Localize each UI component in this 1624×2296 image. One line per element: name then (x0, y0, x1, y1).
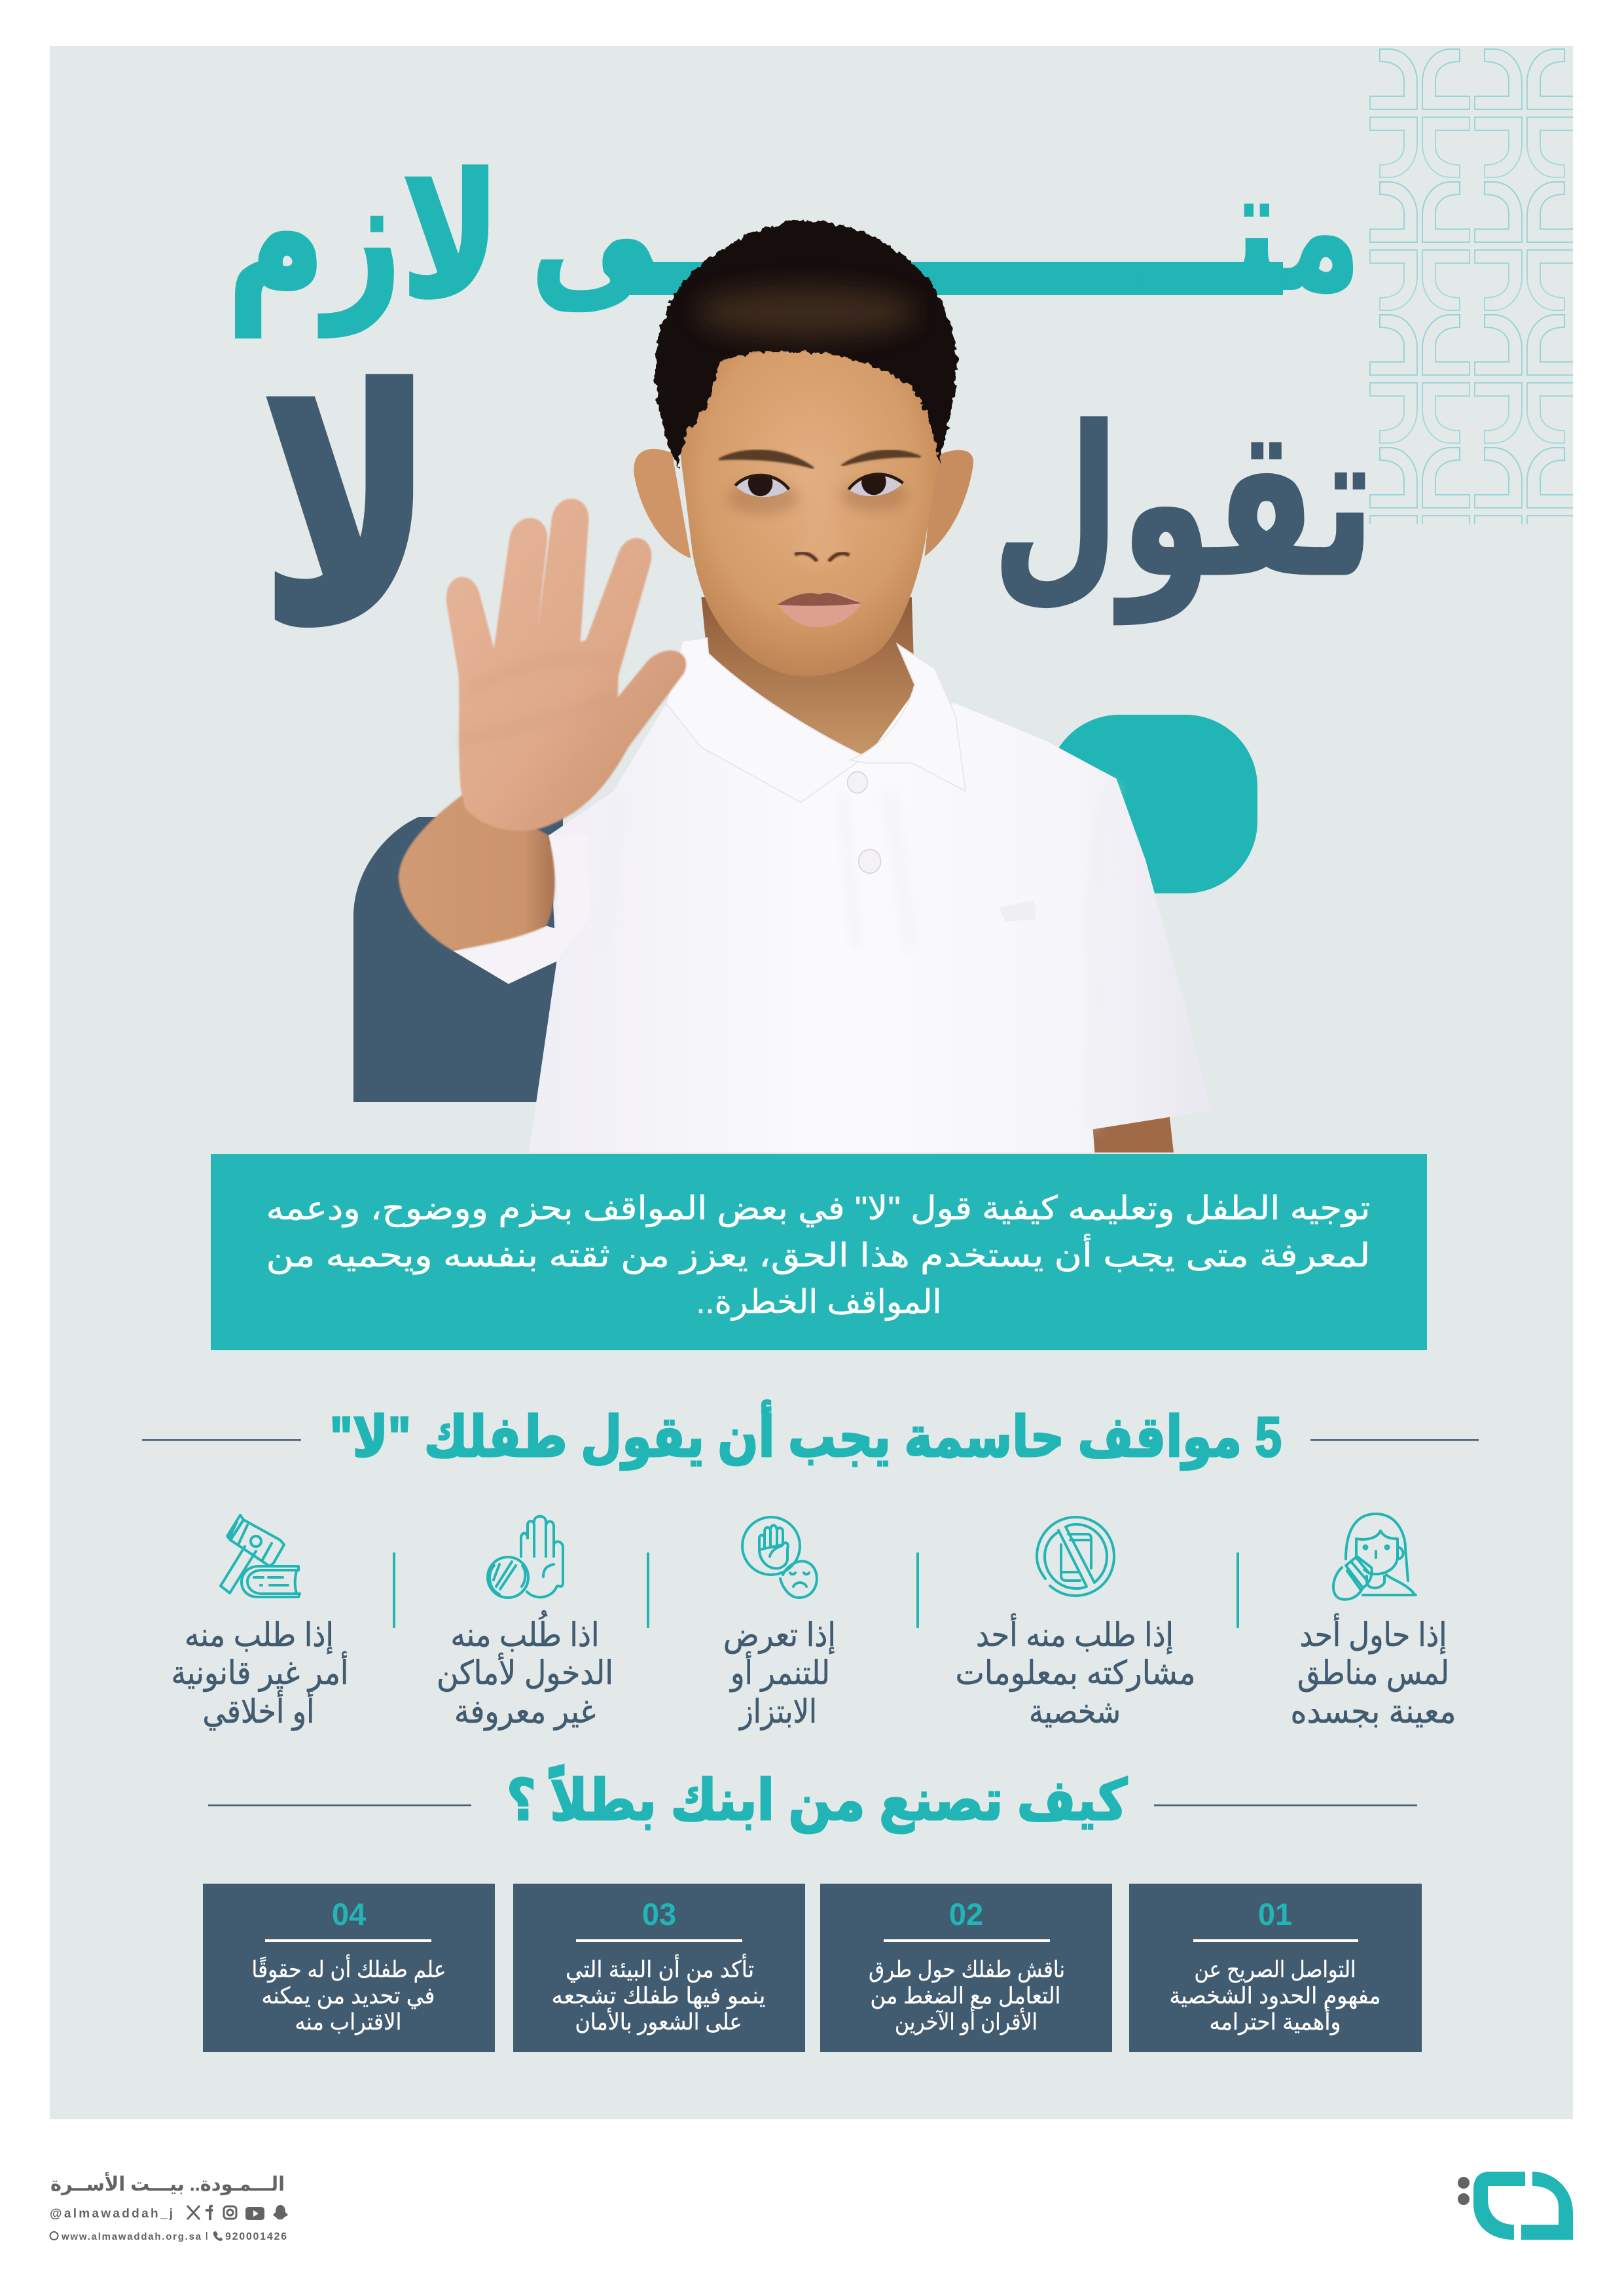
card 03 (513, 1884, 805, 2052)
item text 1 (1291, 1613, 1456, 1730)
hair highlight (696, 287, 918, 337)
card 03: تأكد من أن البيئة التي (566, 1954, 754, 1983)
item text 2: مشاركته بمعلومات (956, 1655, 1195, 1692)
icon: gavel and law book (221, 1515, 300, 1597)
title: first line (228, 131, 1363, 338)
card 04 (203, 1884, 495, 2052)
card 04: الاقتراب منه (295, 2009, 402, 2036)
neck (701, 597, 914, 760)
nose (794, 491, 848, 565)
item text 1: لمس مناطق (1297, 1655, 1449, 1692)
card 03: 03 (642, 1897, 676, 1931)
card 01: مفهوم الحدود الشخصية (1169, 1983, 1381, 2009)
right eye (848, 476, 903, 496)
icon: instagram (224, 2206, 236, 2219)
collar left (666, 637, 865, 802)
footer slogan: الـــمـودة.. بيـــت الأســرة (50, 2172, 285, 2195)
icon: bullying hand and sad face (742, 1517, 817, 1598)
lips (778, 592, 862, 627)
hand (446, 499, 686, 831)
eyebrows (719, 450, 814, 468)
intro text line 3: المواقف الخطرة.. (696, 1283, 941, 1321)
item text 4 (437, 1610, 613, 1731)
item text 3 (723, 1617, 836, 1731)
shirt logo (1000, 901, 1036, 922)
item text 5: إذا طلب منه (185, 1617, 334, 1655)
card 03: ينمو فيها طفلك تشجعه (551, 1983, 766, 2009)
head group (634, 221, 973, 676)
item text 4: غير معروفة (454, 1693, 596, 1731)
icon: facebook (206, 2205, 213, 2220)
photo: boy showing stop hand (399, 221, 1211, 1153)
title word: lazim: لازم (228, 142, 500, 338)
icon: globe (50, 2232, 58, 2240)
eye shadows (727, 482, 799, 514)
intro text line 2: لمعرفة متى يجب أن يستخدم هذا الحق، يعزز من ثقته بنفسه ويحميه من (266, 1234, 1371, 1275)
divider (1236, 1552, 1239, 1628)
title word: taqul: تقول (992, 387, 1375, 626)
item text 5: أو أخلاقي (203, 1690, 314, 1731)
decorative pattern top right (1370, 49, 1574, 576)
footer website: www.almawaddah.org.sa (61, 2231, 202, 2242)
item text 5 (171, 1617, 348, 1731)
footer: brand line and contact (50, 2172, 288, 2242)
shirt folds (602, 785, 1116, 1129)
footer handle: @almawaddah_j (50, 2207, 173, 2221)
card 01 (1129, 1884, 1422, 2052)
item text 2: إذا طلب منه أحد (976, 1613, 1174, 1655)
teal rounded shape behind boy (1047, 715, 1257, 893)
shirt buttons (848, 772, 881, 873)
navy arch shape behind boy (353, 817, 563, 1102)
item text 5: أمر غير قانونية (171, 1651, 348, 1692)
shirt body (529, 704, 1211, 1153)
item text 1: إذا حاول أحد (1300, 1613, 1447, 1655)
divider (393, 1552, 395, 1628)
icon: girl covering mouth (1333, 1514, 1416, 1600)
intro text line 1: توجيه الطفل وتعليمه كيفية قول "لا" في بعض المواقف بحزم ووضوح، ودعمه (266, 1190, 1371, 1228)
divider (916, 1552, 919, 1628)
card 02: الأقران أو الآخرين (895, 2007, 1038, 2036)
item text 4: الدخول لأماكن (437, 1653, 613, 1692)
card 02: التعامل مع الضغط من (871, 1983, 1060, 2009)
title word: la: لا (262, 333, 433, 685)
icon: no phone (1037, 1517, 1114, 1596)
item text 1: معينة بجسده (1291, 1693, 1456, 1730)
collar right (850, 644, 965, 791)
icon: snapchat (273, 2205, 288, 2219)
arm (399, 791, 555, 951)
left eye (736, 476, 789, 497)
card 03: على الشعور بالأمان (575, 2007, 742, 2036)
card 02 (820, 1884, 1112, 2052)
ears (634, 449, 691, 558)
icon: youtube (245, 2207, 264, 2220)
intro box (211, 1154, 1427, 1350)
item text 2: شخصية (1029, 1693, 1121, 1730)
card 01: 01 (1258, 1897, 1292, 1931)
icon: hand with prohibited sign (488, 1516, 563, 1598)
right forearm (1090, 1111, 1174, 1153)
card 02: 02 (949, 1897, 983, 1931)
face (678, 331, 941, 676)
heading: five situations: 5 مواقف حاسمة يجب أن يقول طفلك "لا" (330, 1400, 1282, 1470)
left sleeve (453, 835, 590, 984)
card 04: في تحديد من يمكنه (262, 1983, 435, 2009)
kashida bar of first word (622, 262, 1283, 295)
icon: phone (213, 2231, 223, 2241)
item text 3: للتنمر أو (729, 1651, 830, 1693)
card 04: 04 (332, 1897, 366, 1931)
card 02: ناقش طفلك حول طرق (869, 1957, 1065, 1983)
hair (655, 221, 958, 469)
divider (647, 1552, 649, 1628)
item text 3: الابتزاز (738, 1693, 817, 1731)
item text 3: إذا تعرض (723, 1617, 836, 1655)
title: second line (262, 333, 1375, 685)
heading: how to make a hero: كيف تصنع من ابنك بطلاً ؟ (507, 1765, 1128, 1833)
item text 4: اذا طُلب منه (450, 1610, 600, 1653)
card 04: علم طفلك أن له حقوقًا (251, 1954, 446, 1983)
icon: x (187, 2206, 200, 2219)
footer phone number: 920001426 (225, 2231, 287, 2242)
item text 2 (956, 1613, 1195, 1730)
logo (1458, 2172, 1573, 2240)
card 01: وأهمية احترامه (1210, 2007, 1341, 2036)
card 01: التواصل الصريح عن (1194, 1957, 1356, 1983)
